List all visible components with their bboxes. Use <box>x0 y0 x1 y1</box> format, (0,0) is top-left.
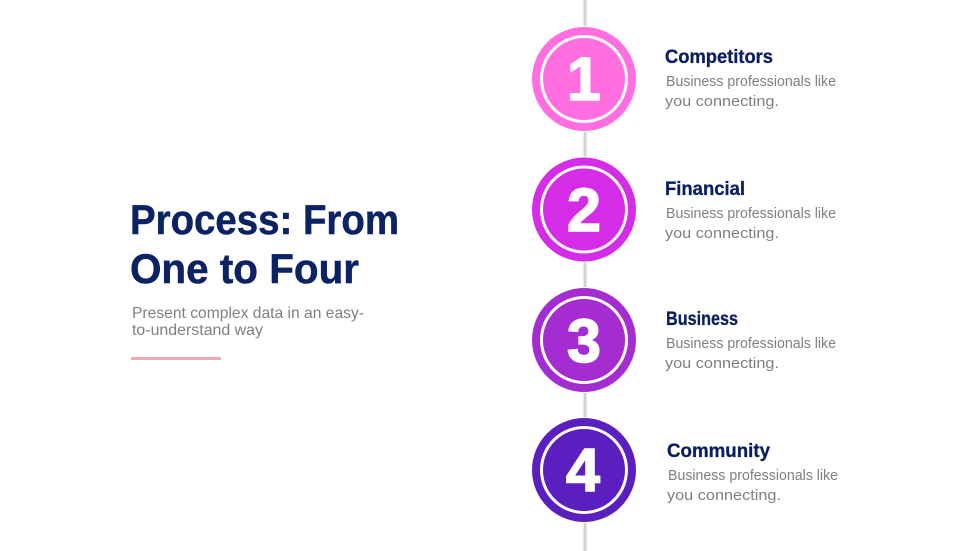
step 3 text: you connecting. <box>665 355 779 372</box>
icon: number badge 1 <box>531 26 637 132</box>
subtitle: Present complex data in an easy- <box>132 305 364 322</box>
icon: number badge 1: 1 <box>567 45 601 113</box>
icon: number badge 3 <box>531 287 637 393</box>
step 1 text: Competitors <box>665 47 773 68</box>
step 4 text: Community <box>667 441 770 462</box>
step 3 text <box>665 309 836 372</box>
step 3 text: Business professionals like <box>666 335 836 352</box>
step 4 <box>531 417 838 523</box>
step 2 text <box>665 179 836 242</box>
step 4 text: you connecting. <box>667 487 781 504</box>
vertical timeline line <box>584 0 586 551</box>
step 4 text <box>667 441 838 504</box>
step 1 <box>531 26 836 132</box>
step 1 text: Business professionals like <box>666 73 836 90</box>
icon: number badge 4 <box>531 417 637 523</box>
accent underline <box>131 357 221 360</box>
step 3 <box>531 287 836 393</box>
title <box>130 196 399 292</box>
subtitle: to-understand way <box>132 322 263 339</box>
title: Process: From <box>130 196 399 243</box>
icon: number badge 2 <box>531 156 637 262</box>
step 2 text: Financial <box>665 179 745 200</box>
subtitle <box>132 305 364 339</box>
step 3 text: Business <box>666 309 738 330</box>
step 1 text: you connecting. <box>665 93 779 110</box>
title: One to Four <box>130 245 359 292</box>
icon: number badge 2: 2 <box>567 176 601 244</box>
icon: number badge 4: 4 <box>566 436 600 504</box>
icon: number badge 3: 3 <box>567 307 601 375</box>
step 2 text: Business professionals like <box>666 205 836 222</box>
step 1 text <box>665 47 836 110</box>
step 2 text: you connecting. <box>665 225 779 242</box>
step 2 <box>531 156 836 262</box>
step 4 text: Business professionals like <box>668 467 838 484</box>
